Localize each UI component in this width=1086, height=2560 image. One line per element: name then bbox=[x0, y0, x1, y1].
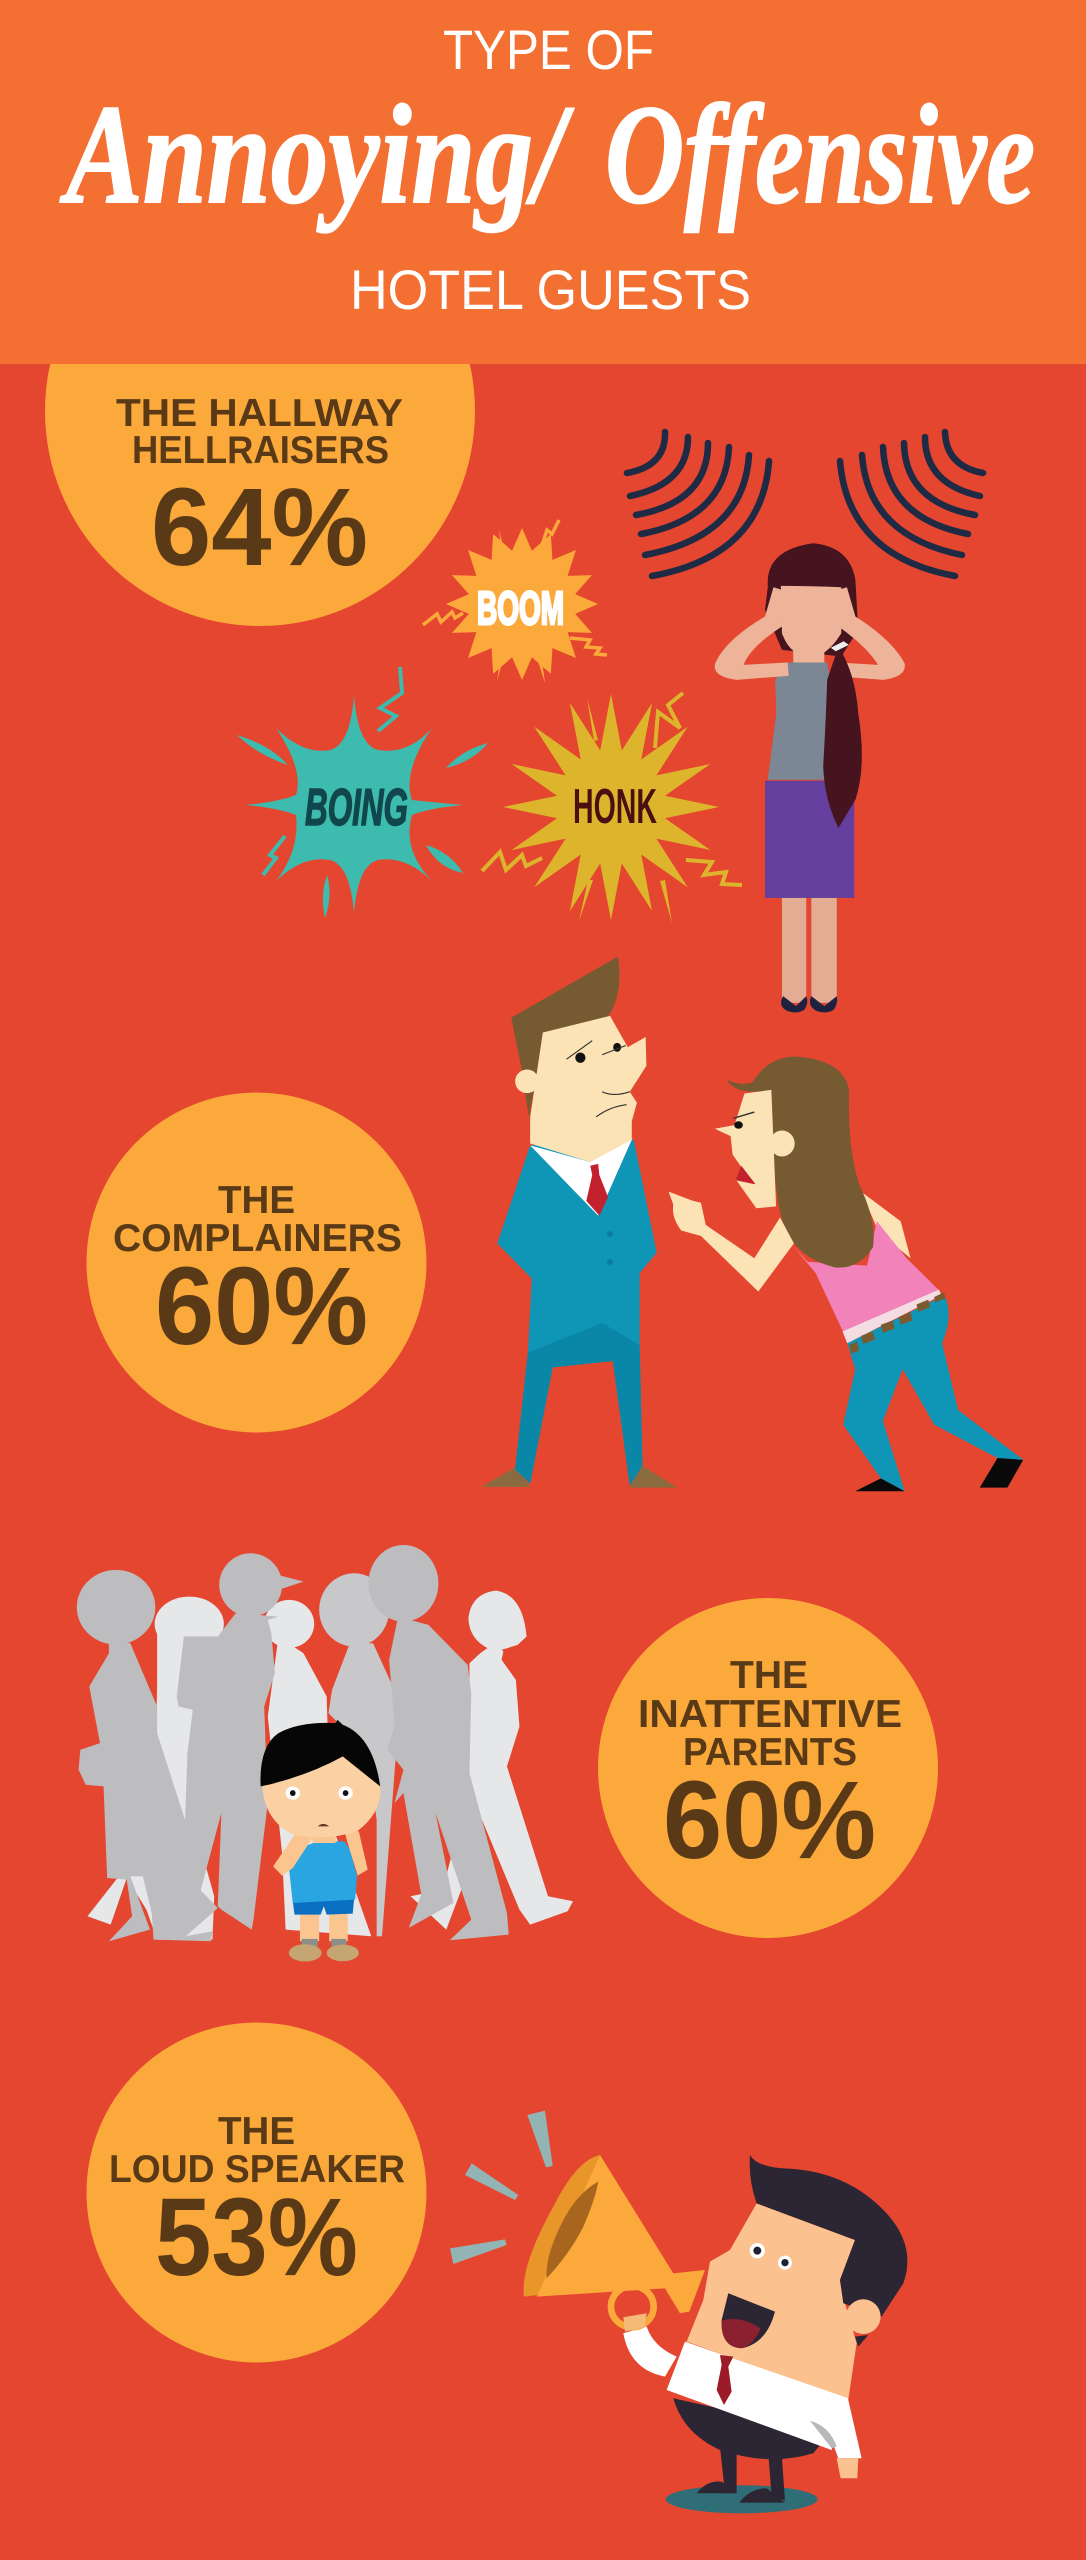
torso bbox=[768, 663, 850, 780]
megaphone cone bbox=[537, 2155, 705, 2313]
panel: hallway hellraisers badge bbox=[45, 196, 475, 626]
necktie bbox=[717, 2355, 733, 2405]
panel: complainers badge: THE bbox=[218, 1179, 295, 1222]
mouth bbox=[722, 2293, 775, 2348]
megaphone handle bbox=[611, 2286, 654, 2327]
burst: honk bbox=[482, 693, 742, 923]
sound rays bbox=[450, 2111, 553, 2264]
burst: boing bbox=[237, 667, 488, 918]
silhouette back right bbox=[411, 1643, 573, 1930]
panel: loud speaker badge bbox=[86, 2022, 426, 2362]
panel: hallway hellraisers badge: 64% bbox=[151, 466, 368, 589]
skirt bbox=[765, 781, 854, 898]
eye bbox=[733, 1112, 754, 1129]
hair bbox=[511, 957, 619, 1118]
illustration: crowd of silhouettes with lost child bbox=[77, 1545, 573, 1962]
arm and pointing hand bbox=[669, 1192, 794, 1292]
panel: inattentive parents badge: 60% bbox=[663, 1759, 876, 1882]
title script: annoying / offensive: Annoying/ bbox=[60, 75, 574, 233]
burst: boing: BOING bbox=[305, 779, 408, 837]
hand on handle bbox=[623, 2313, 647, 2332]
megaphone rim bbox=[524, 2155, 602, 2297]
dark silhouette tall bbox=[368, 1545, 509, 1940]
figure: woman covering her ears bbox=[715, 543, 905, 1012]
burst: boom: BOOM bbox=[477, 582, 564, 634]
hair back bbox=[765, 543, 858, 657]
ear bbox=[846, 2299, 881, 2334]
shirt bbox=[667, 2342, 848, 2450]
child bbox=[260, 1720, 380, 1962]
panel: inattentive parents badge bbox=[598, 1598, 938, 1938]
mid silhouette bbox=[319, 1573, 398, 1936]
figure: man shouting into megaphone bbox=[450, 2111, 907, 2513]
panel: complainers badge bbox=[86, 1092, 426, 1432]
burst: honk: HONK bbox=[573, 780, 657, 834]
face bbox=[781, 586, 841, 657]
panel: complainers badge: 60% bbox=[155, 1245, 368, 1368]
panel: inattentive parents badge: PARENTS bbox=[683, 1731, 857, 1774]
panel: inattentive parents badge: INATTENTIVE bbox=[638, 1693, 902, 1736]
title script: annoying / offensive bbox=[60, 75, 1035, 233]
panel: complainers badge: COMPLAINERS bbox=[113, 1217, 402, 1260]
ear bbox=[769, 1131, 795, 1156]
dark silhouette left bbox=[77, 1570, 218, 1941]
eyes and mouth bbox=[567, 1041, 630, 1117]
face bbox=[530, 1016, 646, 1162]
header banner bbox=[0, 0, 1086, 364]
waist strip bbox=[843, 1290, 941, 1343]
body bbox=[673, 2398, 830, 2459]
panel: hallway hellraisers badge: THE HALLWAY bbox=[116, 392, 403, 435]
dark silhouette with cap bbox=[177, 1553, 303, 1933]
pink top bbox=[794, 1221, 940, 1332]
panel: loud speaker badge: LOUD SPEAKER bbox=[109, 2148, 405, 2191]
neck shadow hair bbox=[855, 2335, 868, 2347]
panel: loud speaker badge: 53% bbox=[155, 2176, 358, 2299]
collar bbox=[530, 1138, 633, 1216]
belt bbox=[849, 1292, 945, 1354]
suit bbox=[497, 1140, 657, 1486]
trousers shading bbox=[515, 1323, 642, 1486]
buttons bbox=[607, 1231, 613, 1265]
face bbox=[687, 2203, 857, 2400]
legs and shoes bbox=[697, 2447, 785, 2503]
raised sleeve bbox=[623, 2327, 677, 2377]
title line: hotel guests: HOTEL GUESTS bbox=[350, 258, 751, 321]
floor shadow bbox=[666, 2485, 818, 2513]
silhouette back centre bbox=[268, 1637, 371, 1936]
light silhouettes bbox=[87, 1591, 573, 1940]
panel: hallway hellraisers badge: HELLRAISERS bbox=[132, 429, 389, 472]
figure: angry woman pointing bbox=[669, 1057, 1023, 1491]
ponytail bbox=[823, 647, 862, 828]
eyes bbox=[750, 2243, 792, 2270]
shoes bbox=[781, 996, 837, 1012]
mouth bbox=[736, 1166, 756, 1184]
panel: inattentive parents badge: THE bbox=[730, 1654, 808, 1697]
arms bbox=[715, 587, 905, 680]
face bbox=[715, 1090, 776, 1208]
shoes bbox=[855, 1458, 1023, 1491]
jeans bbox=[843, 1295, 1023, 1491]
silhouette back left bbox=[87, 1630, 221, 1940]
neck bbox=[793, 650, 824, 665]
burst: boom bbox=[423, 520, 607, 683]
icon: sound waves bbox=[627, 432, 983, 576]
megaphone opening bbox=[547, 2182, 598, 2278]
panel: loud speaker badge: THE bbox=[218, 2110, 295, 2153]
lowered arm bbox=[810, 2400, 862, 2478]
hair bbox=[750, 2155, 907, 2317]
legs bbox=[782, 896, 837, 1003]
hair bbox=[727, 1057, 874, 1268]
title line: type of: TYPE OF bbox=[443, 18, 654, 81]
shoes bbox=[482, 1465, 677, 1488]
back arm bbox=[861, 1192, 911, 1258]
figure: man in teal suit bbox=[482, 957, 677, 1488]
tie bbox=[586, 1164, 608, 1216]
ear bbox=[515, 1070, 539, 1093]
